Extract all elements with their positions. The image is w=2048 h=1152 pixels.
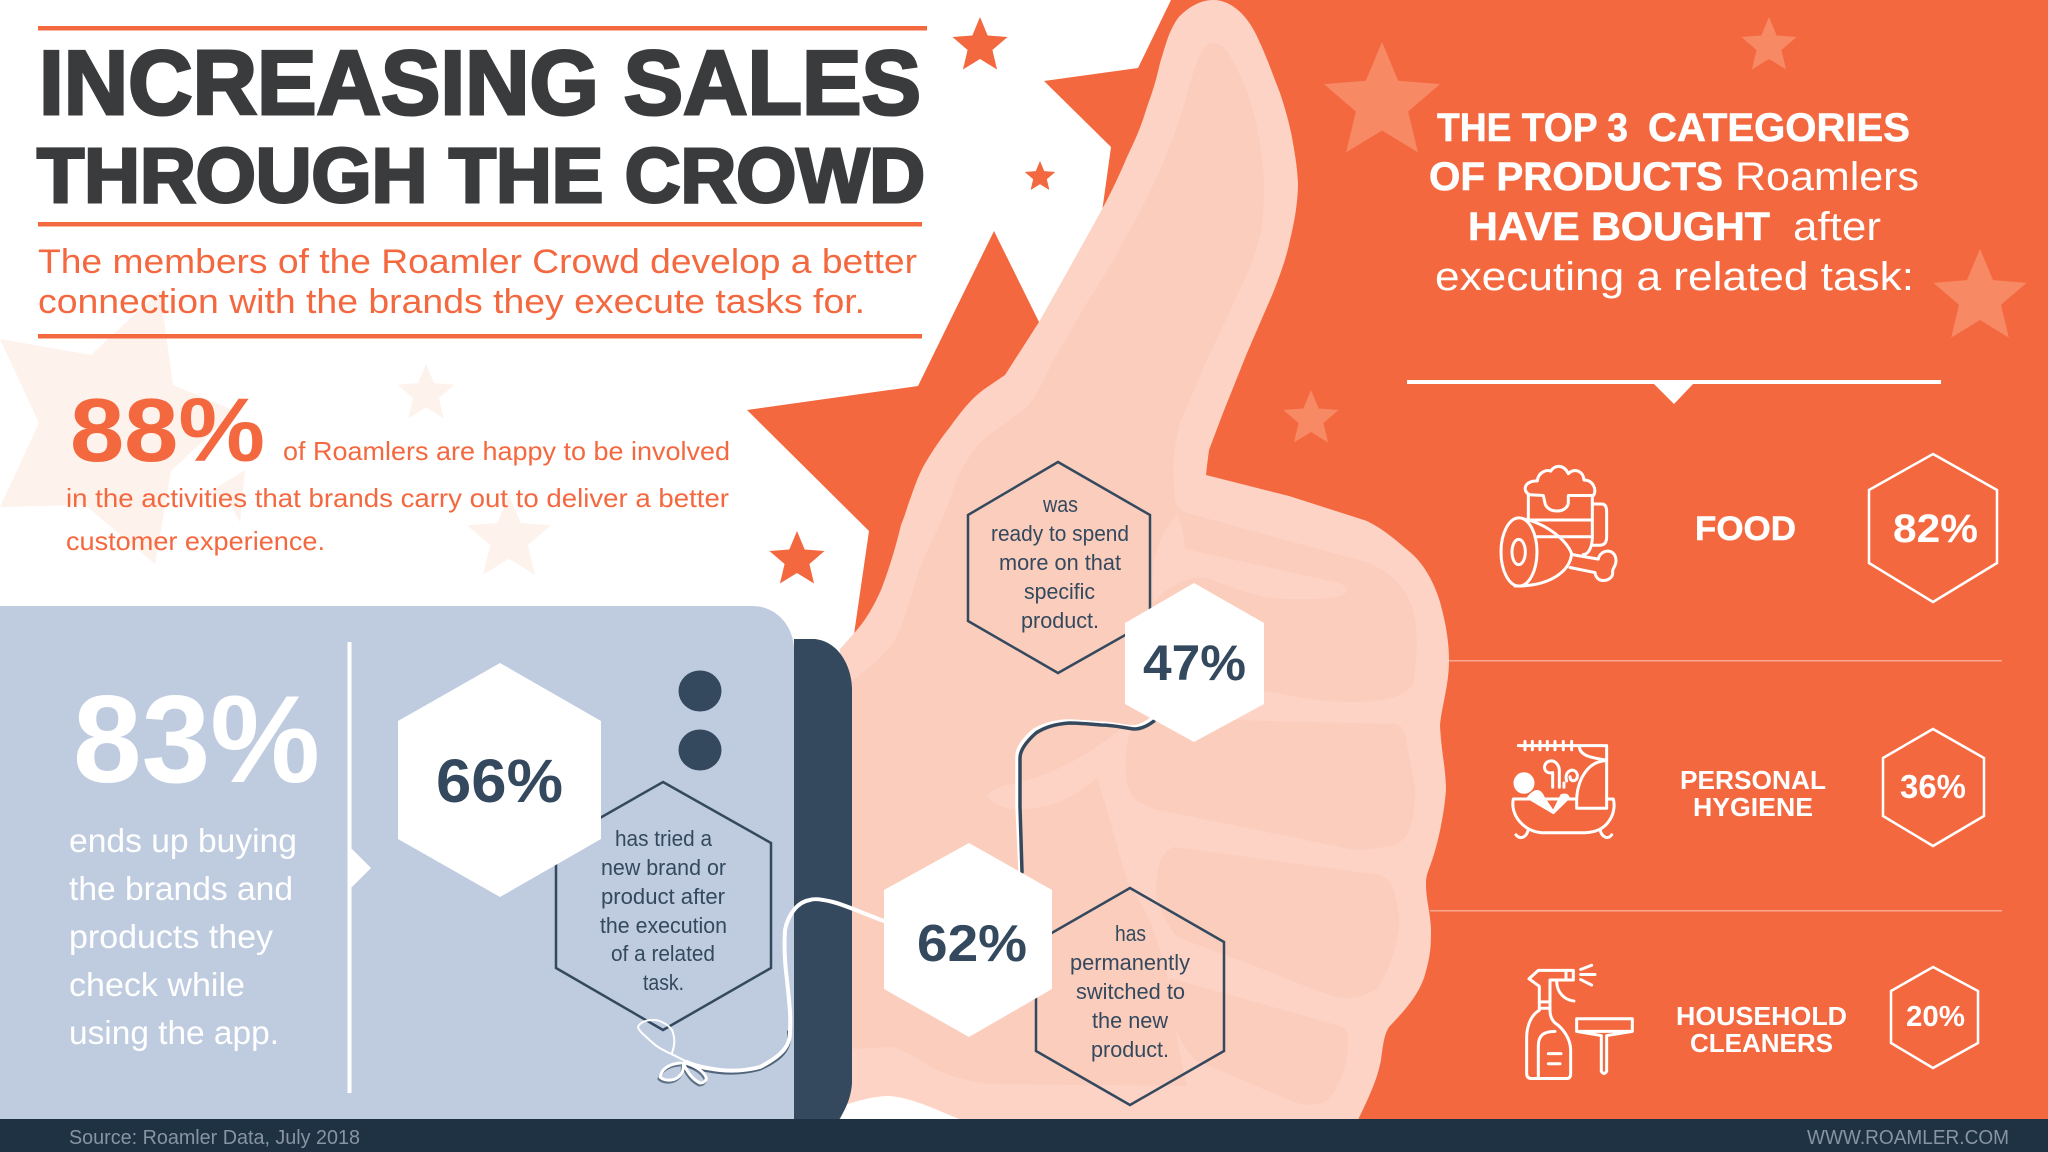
connector string between 47% and 62% [1017, 719, 1154, 872]
panel: blue info card [0, 606, 794, 1120]
separator [1449, 660, 2002, 662]
text: was ready to spend: was [1042, 492, 1078, 517]
hand: crease highlight [1153, 515, 1347, 602]
text: has tried a new brand: the execution [600, 913, 727, 938]
stat: 83 percent [69, 671, 320, 1051]
text: was ready to spend: specific [1024, 579, 1095, 604]
hexagon: 82%: 82% [1893, 507, 1978, 551]
hexagon: 20% [1891, 967, 1978, 1068]
rule above title [38, 26, 927, 30]
text: was ready to spend: product. [1021, 608, 1099, 633]
title line 2: THROUGH THE CROWD [37, 133, 925, 219]
hexagon: 36% [1883, 729, 1984, 846]
83% description: using the app. [69, 1014, 279, 1051]
heading: top 3 categories: after [1793, 205, 1881, 249]
label: household cleaners [1676, 1001, 1847, 1058]
row: household cleaners [1527, 965, 1978, 1079]
text: has permanently switched [1070, 921, 1190, 1062]
star: orange lower [769, 531, 825, 583]
text: has tried a new brand: new brand or [601, 855, 726, 880]
88% description: in the activities that brands carry out to deliver a better [66, 483, 729, 513]
label: food: FOOD [1695, 510, 1796, 548]
heading: top 3 categories: Roamlers [1735, 155, 1919, 199]
divider with pointer [348, 642, 371, 1093]
heading: top 3 categories: HAVE BOUGHT [1468, 205, 1770, 249]
outline hexagon: has tried [556, 782, 771, 1030]
heading: top 3 categories: OF PRODUCTS [1429, 155, 1723, 199]
label: household cleaners: CLEANERS [1690, 1028, 1833, 1058]
heading: top 3 categories: CATEGORIES [1648, 106, 1910, 150]
text: was ready to spend: more on that [999, 550, 1121, 575]
website: WWW.ROAMLER.COM [1807, 1127, 2009, 1149]
88% figure: 88% [70, 381, 265, 481]
rule under subtitle [38, 334, 922, 338]
heading: top 3 categories: executing a related task: [1435, 255, 1914, 299]
83% description: check while [69, 966, 245, 1003]
text: was ready to spend [991, 492, 1129, 633]
text: has permanently switched: switched to [1076, 979, 1185, 1004]
hexagon: 47%: 47% [1143, 635, 1246, 691]
thumbs-up hand [840, 0, 1449, 1120]
83% description: the brands and [69, 870, 293, 907]
title block [37, 26, 927, 226]
icon: beer and ham [1501, 466, 1616, 586]
label: personal hygiene: HYGIENE [1693, 792, 1813, 822]
text: has tried a new brand: of a related [611, 941, 715, 966]
orange background panel [1044, 0, 2048, 1120]
row: personal hygiene [1513, 729, 1984, 846]
icon: bathtub [1513, 741, 1614, 838]
source note: Source: Roamler Data, July 2018 [69, 1127, 360, 1149]
88% description: of Roamlers are happy to be involved [283, 436, 730, 466]
subtitle: connection with the brands they execute tasks for. [38, 283, 865, 321]
label: household cleaners: HOUSEHOLD [1676, 1001, 1847, 1031]
hand: finger 3 [1156, 847, 1399, 998]
83% description: products they [69, 918, 274, 955]
divider with pointer [1407, 380, 1941, 404]
faint background stars on white [0, 291, 551, 575]
outline hexagon: was ready [968, 462, 1150, 673]
hexagon: 20%: 20% [1906, 1001, 1965, 1033]
hand: inner thumb and palm [852, 43, 1417, 1086]
icon: spray and squeegee [1527, 965, 1632, 1079]
text: has tried a new brand: task. [643, 970, 684, 995]
hand: white gap at wrist [840, 1096, 962, 1120]
hexagon: 62% [884, 843, 1052, 1037]
text: has permanently switched: has [1115, 921, 1146, 946]
hand: finger 4 [1166, 978, 1348, 1105]
dark cuff of sleeve [794, 639, 852, 1120]
footer bar [0, 1119, 2048, 1152]
subtitle [38, 243, 917, 321]
text: has permanently switched: permanently [1070, 950, 1190, 975]
hand: finger 2 [1126, 717, 1415, 850]
star: orange small [1025, 161, 1055, 190]
88% description [66, 436, 730, 556]
hand: outer silhouette [840, 0, 1449, 1120]
83% figure: 83% [73, 671, 320, 809]
text: has tried a new brand: has tried a [615, 826, 713, 851]
string with bow [638, 899, 884, 1085]
text: has permanently switched: the new [1092, 1008, 1168, 1033]
hexagon: 62%: 62% [917, 915, 1027, 973]
separator [1430, 910, 2002, 912]
83% description [69, 822, 297, 1051]
hexagon: 82% [1869, 454, 1997, 602]
hexagon: 66% [398, 663, 601, 897]
heading: top 3 categories: THE TOP 3 [1437, 106, 1628, 150]
text: was ready to spend: ready to spend [991, 521, 1129, 546]
text: has permanently switched: product. [1091, 1037, 1169, 1062]
light stars on orange [1283, 17, 2027, 442]
text: has tried a new brand: product after [601, 884, 725, 909]
83% description: ends up buying [69, 822, 297, 859]
row: food [1501, 454, 1997, 602]
title line 1: INCREASING SALES [39, 33, 921, 134]
hexagon: 36%: 36% [1900, 768, 1966, 805]
hexagon: 47% [1125, 583, 1264, 742]
colon dots [678, 670, 722, 770]
stat: 88 percent [66, 381, 730, 556]
88% description: customer experience. [66, 526, 325, 556]
outline hexagon: permanently switched [1036, 888, 1224, 1105]
heading: top 3 categories [1429, 106, 1919, 299]
subtitle: The members of the Roamler Crowd develop a better [38, 243, 917, 281]
large orange star behind hand [747, 231, 1110, 660]
star: orange top [952, 17, 1008, 69]
label: personal hygiene: PERSONAL [1680, 765, 1826, 795]
hexagon: 66%: 66% [436, 747, 563, 815]
text: has tried a new brand [600, 826, 727, 995]
label: personal hygiene [1680, 765, 1826, 822]
rule below title [38, 222, 922, 226]
